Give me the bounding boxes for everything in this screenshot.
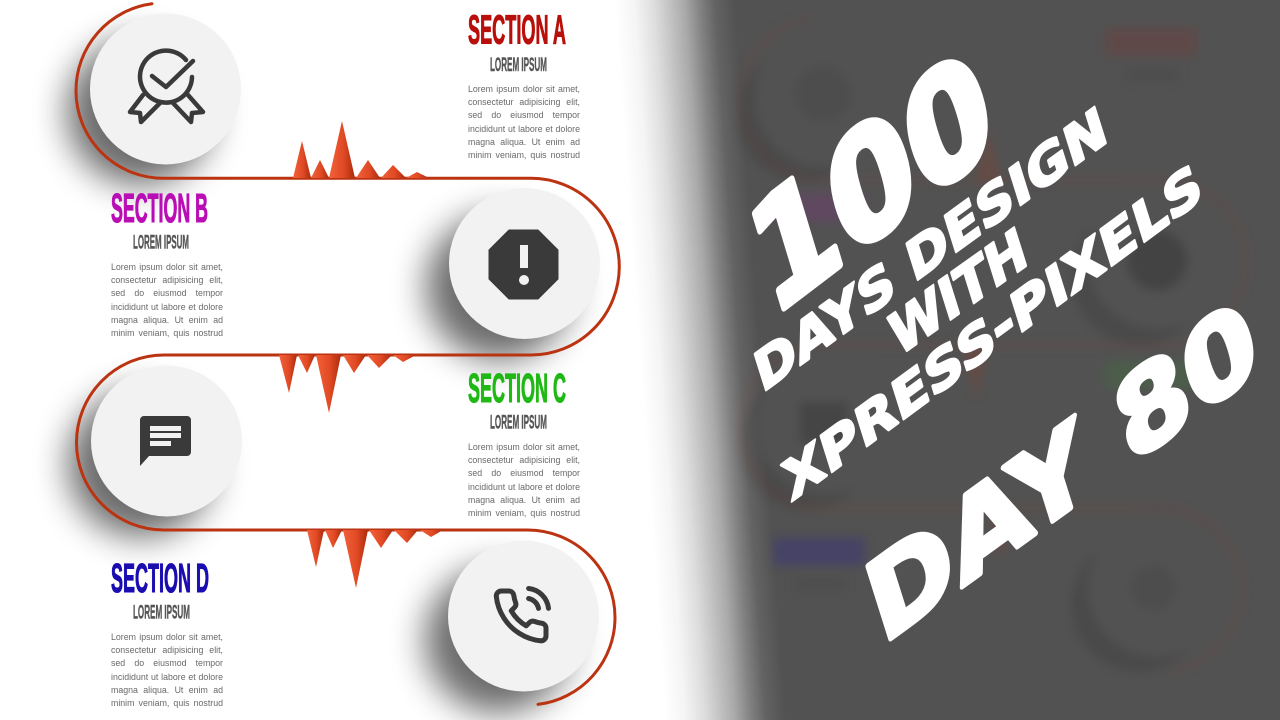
- body text B: Lorem ipsum dolor sit amet,: [111, 262, 223, 272]
- waveform spikes: [279, 121, 443, 588]
- title line: Xpress-Pixels: XPRESS-PIXELS: [777, 152, 1209, 514]
- text: LOREM IPSUM: [490, 55, 547, 76]
- ghost of infographic behind title: [738, 18, 1246, 672]
- body text D: Lorem ipsum dolor sit amet,: [111, 632, 223, 642]
- icon: warning octagon: [489, 230, 558, 299]
- body text C: sed do eiusmod tempor: [468, 468, 580, 478]
- node A: badge: [90, 14, 241, 164]
- node D: phone: [448, 540, 599, 692]
- big slanted title: [733, 16, 1271, 669]
- text: LOREM IPSUM: [133, 232, 189, 254]
- icon: phone call: [496, 588, 548, 641]
- body text D: [111, 632, 223, 708]
- body text D: consectetur adipisicing elit,: [111, 645, 223, 655]
- node C: chat: [91, 366, 242, 516]
- body text C: incididunt ut labore et dolore: [468, 482, 580, 492]
- body text B: [111, 262, 223, 338]
- body text C: [468, 442, 580, 518]
- title line: Days Design: DAYS DESIGN: [748, 95, 1114, 405]
- body text A: consectetur adipisicing elit,: [468, 97, 580, 107]
- circle drop shadows: [67, 39, 572, 713]
- body text C: Lorem ipsum dolor sit amet,: [468, 442, 580, 452]
- body text B: magna aliqua. Ut enim ad: [111, 315, 223, 325]
- body text A: minim veniam, quis nostrud: [468, 150, 580, 160]
- title line: Day 80: DAY 80: [853, 275, 1271, 669]
- text: SECTION D: [111, 555, 209, 601]
- timeline connector line: [76, 4, 619, 704]
- body text B: incididunt ut labore et dolore: [111, 302, 223, 312]
- body text C: consectetur adipisicing elit,: [468, 455, 580, 465]
- text: SECTION C: [468, 365, 566, 411]
- body text C: magna aliqua. Ut enim ad: [468, 495, 580, 505]
- body text B: sed do eiusmod tempor: [111, 288, 223, 298]
- body text D: minim veniam, quis nostrud: [111, 698, 223, 708]
- body text C: minim veniam, quis nostrud: [468, 508, 580, 518]
- body text B: consectetur adipisicing elit,: [111, 275, 223, 285]
- title line: WITH: WITH: [883, 214, 1034, 369]
- body text A: Lorem ipsum dolor sit amet,: [468, 84, 580, 94]
- text: LOREM IPSUM: [490, 412, 547, 434]
- text: SECTION A: [468, 6, 566, 52]
- title line: 100: 100: [733, 16, 1010, 350]
- body text A: sed do eiusmod tempor: [468, 110, 580, 120]
- icon: chat bubble: [140, 416, 191, 466]
- body text D: magna aliqua. Ut enim ad: [111, 685, 223, 695]
- text: SECTION B: [111, 185, 208, 231]
- body text D: sed do eiusmod tempor: [111, 658, 223, 668]
- body text B: minim veniam, quis nostrud: [111, 328, 223, 338]
- body text A: [468, 84, 580, 160]
- body text A: incididunt ut labore et dolore: [468, 124, 580, 134]
- body text A: magna aliqua. Ut enim ad: [468, 137, 580, 147]
- body text D: incididunt ut labore et dolore: [111, 672, 223, 682]
- text: LOREM IPSUM: [133, 602, 190, 624]
- node B: warning: [449, 188, 600, 339]
- icon: award badge: [130, 51, 203, 122]
